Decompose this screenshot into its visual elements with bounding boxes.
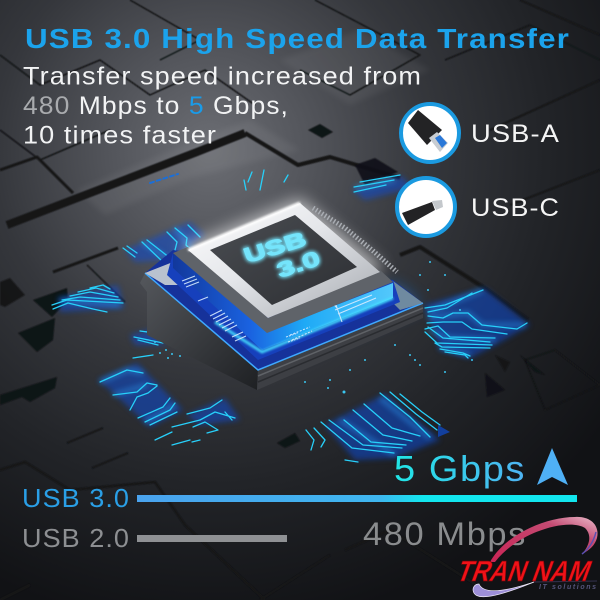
lower-left traces: [100, 370, 143, 382]
chip: grey middle layer: [173, 247, 393, 333]
icon: USB-C connector: [397, 178, 455, 236]
chip: USB 3.0 processor: [140, 198, 423, 390]
logo: Tran Nam IT solutions: IT solutions: [539, 584, 596, 591]
chip glow: [160, 198, 420, 370]
label: 480 Mbps: 480 Mbps: [363, 516, 527, 552]
chip: blue glass layer: [167, 253, 400, 360]
label: USB 2.0: USB 2.0: [22, 523, 130, 553]
chip label: USB: [241, 228, 309, 268]
description text: 10 times faster: [23, 122, 217, 150]
description text: 480 Mbps to 5 Gbps,: [23, 92, 289, 120]
chip: dark inner plate: [210, 215, 357, 305]
chip label: 3.0: [274, 246, 323, 282]
chip label: [241, 228, 323, 282]
bar: USB 3.0: [137, 495, 577, 502]
icon: USB-A connector: [401, 104, 459, 162]
label: USB-C: USB-C: [471, 194, 560, 222]
circuit traces: glowing blue patches: [52, 170, 530, 462]
lower-centre fan: [306, 428, 325, 450]
description text: [23, 62, 422, 150]
title: USB 3.0 High Speed Data Transfer: [25, 23, 570, 54]
label: USB-A: USB-A: [471, 120, 560, 148]
label: USB 3.0: USB 3.0: [22, 483, 130, 513]
logo: Tran Nam IT solutions: [453, 517, 598, 597]
chip: white top frame: [188, 203, 380, 318]
bar: USB 2.0: [137, 535, 287, 542]
chip base: [140, 250, 423, 390]
label: 5 Gbps: 5 Gbps: [394, 448, 526, 489]
upper-left traces: [123, 246, 137, 257]
description text: Transfer speed increased from: [23, 62, 422, 90]
speed chart: [22, 448, 577, 553]
left fan: [53, 303, 107, 312]
right fan: [425, 290, 483, 308]
icon: up arrow: [537, 448, 568, 485]
small left traces: [134, 331, 163, 345]
top traces near USB-C: [354, 175, 400, 192]
